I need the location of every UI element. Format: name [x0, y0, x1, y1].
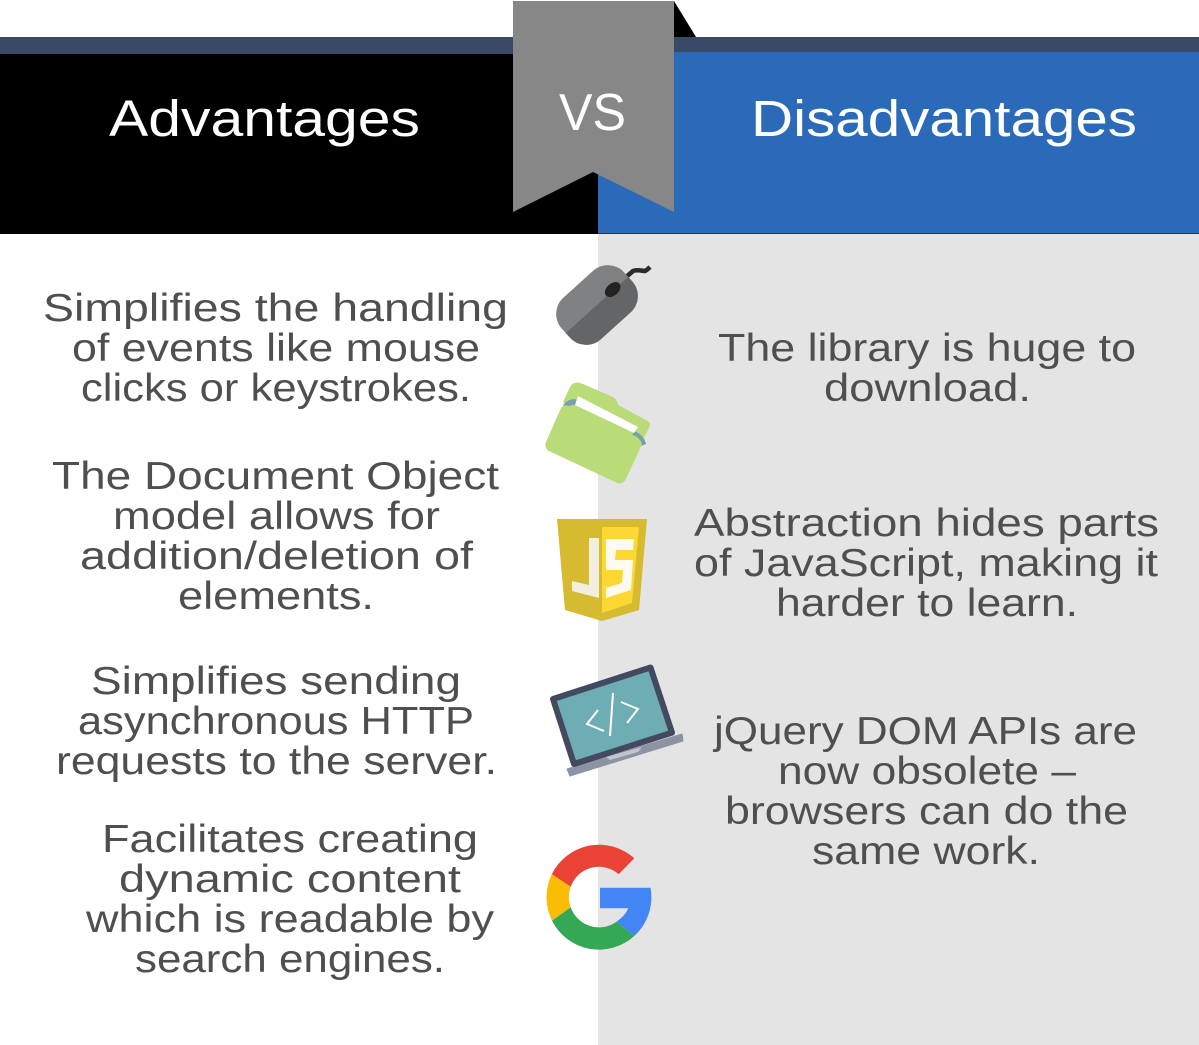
disadvantage: obsolete APIs: now obsolete –	[778, 750, 1076, 793]
disadvantage: size: The library is huge to	[718, 327, 1136, 370]
advantage: events	[43, 287, 508, 410]
disadvantage: abstraction: of JavaScript, making it	[694, 542, 1158, 585]
advantage: HTTP: Simplifies sending	[91, 660, 461, 703]
panel: disadvantages background	[598, 234, 1199, 1045]
advantage: dynamic content: which is readable by	[85, 898, 495, 941]
disadvantage: size: download.	[824, 367, 1031, 410]
disadvantage: obsolete APIs: browsers can do the	[725, 790, 1128, 833]
icon: laptop	[553, 668, 683, 776]
disadvantage: obsolete APIs	[713, 710, 1137, 873]
disadvantages list	[694, 327, 1159, 873]
advantage: events: of events like mouse	[72, 327, 480, 370]
heading: Disadvantages: Disadvantages	[751, 90, 1137, 147]
disadvantage: obsolete APIs: jQuery DOM APIs are	[713, 710, 1137, 753]
advantage: events: clicks or keystrokes.	[81, 367, 471, 410]
advantages list	[43, 287, 508, 981]
advantage: HTTP	[56, 660, 497, 783]
disadvantage: abstraction: harder to learn.	[776, 582, 1078, 625]
advantage: DOM: addition/deletion of	[80, 535, 473, 578]
advantage: dynamic content: dynamic content	[119, 858, 461, 901]
VS ribbon	[513, 1, 674, 212]
advantage: dynamic content: search engines.	[135, 938, 445, 981]
heading: Advantages: Advantages	[109, 90, 420, 147]
advantage: HTTP: requests to the server.	[56, 740, 497, 783]
disadvantage: abstraction: Abstraction hides parts	[694, 502, 1159, 545]
icon: mouse	[547, 256, 650, 354]
icon: JavaScript shield	[557, 519, 647, 621]
icon: Google G	[547, 845, 651, 950]
icon: folder	[545, 383, 650, 483]
advantage: DOM: model allows for	[113, 495, 440, 538]
advantage: dynamic content: Facilitates creating	[102, 818, 478, 861]
advantage: DOM: elements.	[178, 575, 374, 618]
advantage: HTTP: asynchronous HTTP	[78, 700, 474, 743]
disadvantage: abstraction	[694, 502, 1159, 625]
header band	[0, 37, 1199, 234]
advantage: DOM: The Document Object	[52, 455, 499, 498]
VS label: VS	[559, 84, 626, 142]
ribbon fold	[674, 1, 696, 37]
advantage: DOM	[52, 455, 499, 618]
disadvantage: obsolete APIs: same work.	[812, 830, 1040, 873]
disadvantage: size	[718, 327, 1136, 410]
advantage: events: Simplifies the handling	[43, 287, 508, 330]
advantage: dynamic content	[85, 818, 495, 981]
